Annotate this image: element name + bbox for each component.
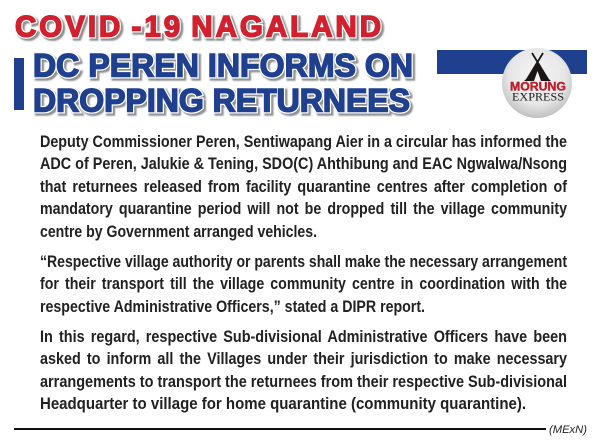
accent bar beside headline [14, 58, 24, 110]
headline: DC Peren informs on dropping returnees: DROPPING RETURNEES [33, 82, 410, 118]
paragraph 3: Headquarter to village for home quarantine (community quarantine). [40, 394, 526, 413]
logo: The Morung Express: MORUNG [510, 80, 566, 94]
title: COVID-19 Nagaland: COVID -19 NAGALAND [17, 12, 383, 46]
title: COVID-19 Nagaland: COVID -19 NAGALAND [15, 10, 381, 44]
headline: DC Peren informs on dropping returnees: DROPPING RETURNEES [35, 84, 412, 120]
source rule [14, 428, 546, 430]
paragraph 2 [40, 252, 567, 316]
logo: The Morung Express [502, 48, 572, 118]
source credit: (MExN) [549, 424, 587, 436]
paragraph 1: centre by Government arranged vehicles. [40, 222, 317, 241]
headline: DC Peren informs on dropping returnees: DROPPING RETURNEES [33, 82, 410, 118]
paragraph 3 [40, 327, 568, 413]
title: COVID-19 Nagaland: COVID -19 NAGALAND [15, 10, 381, 44]
paragraph 1 [40, 132, 568, 241]
logo: The Morung Express: EXPRESS [512, 92, 564, 104]
headline: DC Peren informs on dropping returnees: DC PEREN INFORMS ON [33, 48, 413, 84]
headline: DC Peren informs on dropping returnees [33, 48, 415, 120]
logo band [437, 50, 587, 74]
paragraph 2: respective Administrative Officers,” stated a DIPR report. [40, 297, 425, 316]
headline: DC Peren informs on dropping returnees: DC PEREN INFORMS ON [33, 48, 413, 84]
headline: DC Peren informs on dropping returnees: DC PEREN INFORMS ON [35, 50, 415, 86]
